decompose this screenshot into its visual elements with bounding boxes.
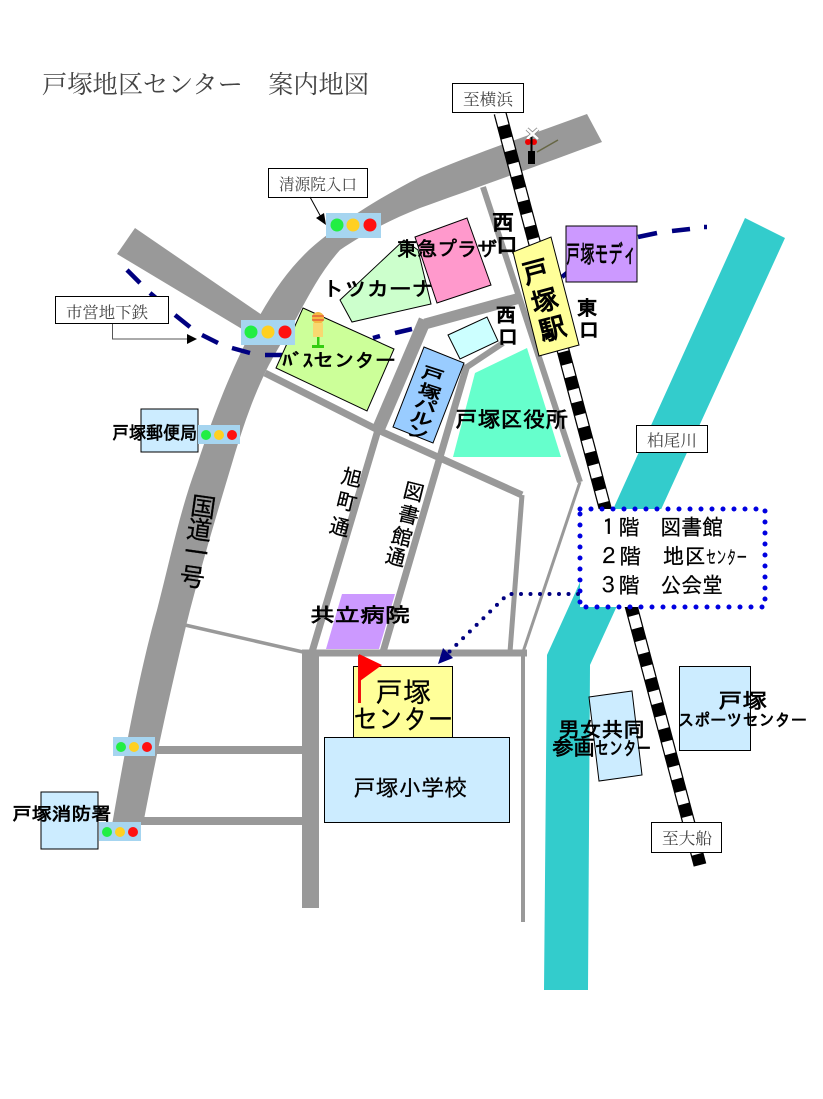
label: 旭町通 — [327, 465, 365, 541]
label: 東口 — [577, 298, 599, 342]
building: 共立病院 — [310, 594, 410, 649]
building: 男女共同参画センター — [552, 691, 651, 781]
building: 男女共同参画センター: 男女共同 — [558, 719, 645, 742]
building: small annex — [448, 317, 498, 359]
building: 東急プラザ — [397, 218, 497, 303]
traffic light: 清源院入口 — [326, 213, 381, 238]
label: 西口 lower — [496, 305, 518, 349]
building: 戸塚郵便局: 戸塚郵便局 — [112, 423, 197, 443]
building: 共立病院: 共立病院 — [310, 605, 410, 627]
building: 戸塚モディ — [566, 226, 637, 282]
arrow: floor guide to center — [438, 594, 578, 664]
building: 戸塚消防署 — [12, 792, 111, 849]
building: 戸塚スポーツセンター — [678, 666, 807, 750]
callout: 至横浜: 至横浜 — [463, 91, 514, 109]
building: 戸塚スポーツセンター: 戸塚 — [718, 690, 767, 713]
building: 東急プラザ: 東急プラザ — [397, 238, 497, 261]
callout: 市営地下鉄: 市営地下鉄 — [66, 303, 148, 322]
building: 戸塚スポーツセンター: スポーツセンター — [678, 711, 807, 730]
building: 男女共同参画センター: 参画 — [552, 737, 595, 760]
label: 西口 upper — [492, 210, 518, 258]
traffic light: mid route — [113, 737, 155, 756]
icon: railroad crossing — [525, 129, 558, 164]
title: 戸塚地区センター 案内地図 — [42, 71, 369, 99]
building: 男女共同参画センター: センター — [595, 739, 651, 760]
label: 旭町通: 旭 — [339, 465, 365, 492]
label: 図書館通 — [383, 479, 427, 571]
callout: 柏尾川 — [636, 426, 708, 452]
building: 戸塚駅: 戸 — [519, 254, 553, 290]
traffic light: subway crossing — [241, 320, 295, 345]
building: 戸塚小学校 — [324, 738, 510, 822]
label: 旭町通: 町 — [334, 489, 360, 516]
building: 戸塚小学校: 戸塚小学校 — [353, 775, 467, 801]
building: バスセンター — [276, 308, 396, 411]
label: 国道一号 — [177, 490, 218, 594]
building: 戸塚駅 — [513, 237, 579, 356]
label: 旭町通: 通 — [327, 514, 353, 541]
building: トツカーナ: トツカーナ — [322, 279, 434, 301]
traffic light: fire station — [99, 822, 141, 841]
road network — [143, 187, 580, 922]
building: 戸塚センター: 戸塚 — [375, 677, 431, 708]
callout: floor guide: １階 図書館 — [598, 515, 723, 540]
callout: 至大船 — [652, 822, 722, 852]
building: 戸塚駅: 塚 — [528, 283, 562, 319]
building: 戸塚パルン — [393, 347, 464, 445]
callout: 至横浜 — [452, 84, 524, 112]
label: 国道一号: 道 — [184, 513, 214, 547]
label: 東口: 東 — [577, 298, 597, 320]
label: 国道一号: 号 — [177, 560, 207, 594]
building: 戸塚パルン: ル — [408, 407, 435, 431]
building: 戸塚区役所: 戸塚区役所 — [455, 407, 568, 432]
river: 柏尾川 — [544, 218, 785, 990]
road: northwest branch — [117, 228, 262, 332]
subway line — [127, 227, 707, 355]
icon: red flag — [358, 654, 382, 703]
label: 西口 lower: 口 — [498, 327, 518, 349]
building: 戸塚パルン: 塚 — [416, 380, 443, 404]
label: 西口 upper: 西 — [492, 210, 514, 235]
callout: floor guide: ３階 公会堂 — [598, 573, 723, 598]
callout: 清源院入口 — [268, 168, 368, 198]
label: 図書館通: 館 — [389, 524, 415, 551]
callout: 市営地下鉄 — [56, 296, 168, 324]
building: 戸塚モディ: 戸塚モディ — [566, 241, 637, 269]
label: 東口: 口 — [579, 320, 599, 342]
label: 図書館通: 通 — [383, 544, 409, 571]
callout: 柏尾川: 柏尾川 — [647, 432, 697, 450]
label: 図書館通: 図 — [401, 479, 427, 506]
callout: floor guide — [580, 509, 765, 607]
icon: bus stop — [312, 312, 324, 348]
building: 戸塚センター — [353, 666, 453, 738]
building: バスセンター: ﾊﾞｽセンター — [282, 351, 396, 372]
road: national route 1 — [112, 114, 602, 825]
building: トツカーナ — [322, 240, 434, 322]
building: 戸塚センター: センター — [353, 704, 453, 735]
railway — [500, 113, 700, 865]
building: 戸塚駅: 駅 — [536, 311, 570, 347]
traffic light: post office — [198, 425, 240, 444]
building: 戸塚区役所 — [453, 348, 568, 457]
building: 戸塚パルン: 戸 — [419, 363, 446, 387]
building: 戸塚消防署: 戸塚消防署 — [12, 804, 111, 824]
building: 戸塚パルン: パ — [412, 394, 439, 418]
label: 西口 lower: 西 — [496, 305, 516, 327]
callout: floor guide: センター — [706, 548, 747, 569]
callout: 清源院入口: 清源院入口 — [279, 176, 357, 194]
arrow: 清源院入口 to traffic light — [310, 197, 326, 225]
arrow: 市営地下鉄 to subway line — [112, 324, 197, 344]
building: 戸塚パルン: ン — [404, 421, 431, 445]
label: 西口 upper: 口 — [496, 233, 518, 258]
callout: 至大船: 至大船 — [662, 830, 712, 848]
label: 国道一号: 一 — [181, 536, 211, 570]
callout: floor guide: ２階 地区 — [598, 544, 706, 569]
building: 戸塚郵便局 — [112, 409, 198, 452]
label: 国道一号: 国 — [188, 490, 218, 524]
label: 図書館通: 書 — [396, 502, 422, 529]
